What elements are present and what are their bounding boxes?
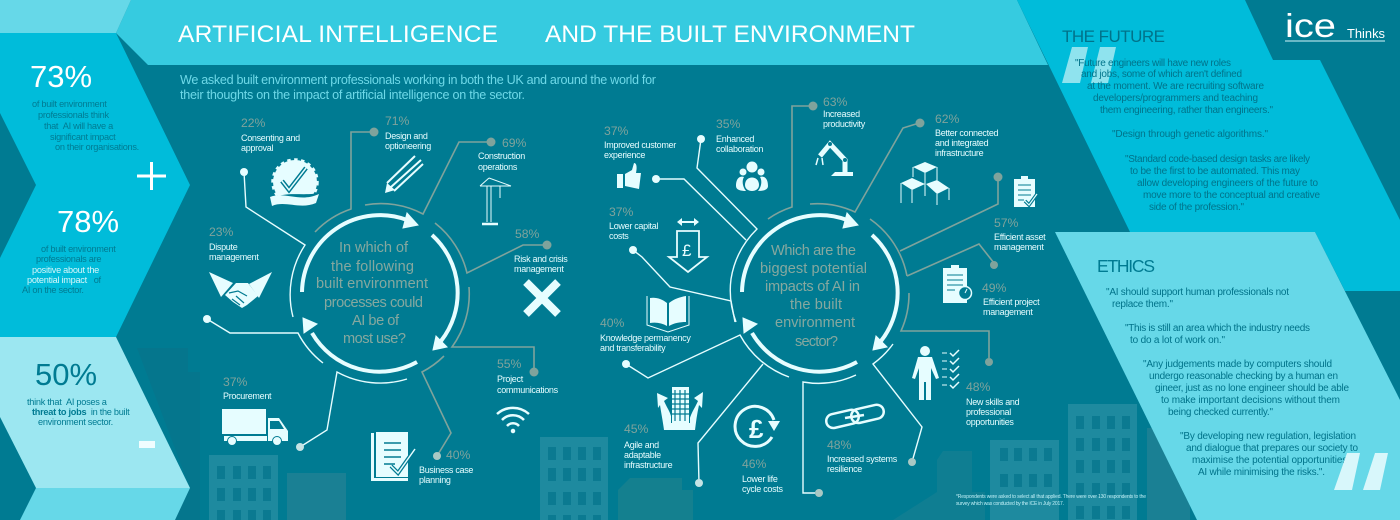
- future quotes: at the moment. We are recruiting software: [1087, 81, 1264, 92]
- footnote: survey which was conducted by the ICE in July 2017.: [956, 501, 1064, 507]
- item: risk and crisis management: management: [514, 264, 564, 274]
- circle question: most use?: [343, 331, 406, 347]
- icon: handshake: [209, 272, 272, 308]
- item: efficient project management: management: [983, 307, 1033, 317]
- icon: group of people: [736, 162, 768, 191]
- item: consenting and approval: [241, 116, 325, 212]
- stat: 78 percent: positive about the: [32, 265, 99, 275]
- icon: minus: [139, 441, 155, 448]
- ethics quotes: "Any judgements made by computers should: [1143, 359, 1332, 370]
- circle question: biggest potential: [760, 261, 867, 277]
- circle question: the built: [790, 297, 842, 313]
- intro text: We asked built environment professionals working in both the UK and around the world for: [180, 73, 656, 87]
- icon: opening quote mark: [1062, 47, 1116, 83]
- item: dispute management: [209, 225, 272, 308]
- ring arrows: [302, 213, 458, 372]
- item: consenting and approval: 22%: [241, 116, 266, 130]
- future quotes: side of the profession.": [1149, 202, 1244, 213]
- item: procurement: [222, 375, 288, 446]
- item: lower life cycle costs: Lower life: [742, 474, 778, 484]
- future quotes: allow developing engineers of the future to: [1137, 178, 1318, 189]
- item: lower life cycle costs: 46%: [742, 457, 767, 471]
- circle question: the following: [331, 259, 414, 275]
- stat: 78 percent: AI on the sector.: [22, 285, 84, 295]
- item: lower life cycle costs: cycle costs: [742, 484, 784, 494]
- item: new skills and professional opportunities: opportunities: [966, 417, 1014, 427]
- connector lines: [203, 128, 552, 460]
- item: new skills and professional opportunities: [912, 346, 1020, 427]
- item: better connected infrastructure: 62%: [935, 112, 960, 126]
- circle question: [760, 243, 867, 350]
- item: better connected infrastructure: Better connected: [935, 128, 999, 138]
- ethics quotes: AI while minimising the risks.".: [1198, 467, 1325, 478]
- item: design and optioneering: optioneering: [385, 141, 431, 151]
- circle question: built environment: [316, 276, 428, 292]
- item: knowledge permanency and transferability: Knowledge permanency: [600, 333, 691, 343]
- chart: impacts circle: [622, 102, 1002, 497]
- item: efficient asset management: [994, 176, 1046, 252]
- ethics quotes: gineer, just as no lone engineer should be able: [1155, 383, 1349, 394]
- item: better connected infrastructure: [901, 112, 999, 205]
- future quotes: developers/programmers and teaching: [1093, 93, 1258, 104]
- logo: ice thinks: [1285, 7, 1385, 44]
- icon: open book: [647, 296, 689, 332]
- item: knowledge permanency and transferability: and transferability: [600, 343, 666, 353]
- item: enhanced collaboration: [716, 117, 768, 191]
- item: risk and crisis management: [514, 227, 568, 314]
- item: increased productivity: [816, 95, 866, 176]
- circle question: processes could: [324, 295, 423, 311]
- ethics quotes: and dialogue that prepares our society to: [1186, 443, 1358, 454]
- item: design and optioneering: 71%: [385, 114, 410, 128]
- item: lower life cycle costs: [735, 406, 784, 494]
- ethics quotes: "By developing new regulation, legislation: [1180, 431, 1356, 442]
- title: ARTIFICIAL INTELLIGENCE: [178, 21, 498, 48]
- ethics quotes: being checked currently.": [1168, 407, 1273, 418]
- footnote: *Respondents were asked to select all that applied. There were over 130 respondents to the: [956, 494, 1146, 500]
- item: increased productivity: 63%: [823, 95, 848, 109]
- future quotes: "Future engineers will have new roles: [1075, 58, 1231, 69]
- item: construction operations: 69%: [502, 136, 527, 150]
- icon: clipboard stopwatch: [943, 265, 972, 303]
- future quotes: [1075, 58, 1320, 213]
- icon: badge: [264, 160, 325, 212]
- stat: 73 percent: [30, 59, 139, 152]
- icon: document with tick: [371, 432, 415, 481]
- intro text: [180, 73, 656, 102]
- item: knowledge permanency and transferability: [600, 296, 691, 353]
- icon: wifi: [497, 408, 529, 432]
- panel: left positive statistics: [0, 0, 190, 337]
- heading: ethics: ETHICS: [1097, 256, 1155, 276]
- item: lower capital costs: 37%: [609, 205, 634, 219]
- item: business case planning: 40%: [446, 448, 471, 462]
- item: dispute management: Dispute: [209, 242, 238, 252]
- item: enhanced collaboration: collaboration: [716, 144, 763, 154]
- ethics quotes: to make important decisions without them: [1161, 395, 1340, 406]
- panel: left threat statistic: [0, 337, 190, 520]
- item: procurement: Procurement: [223, 391, 272, 401]
- circle question: environment: [775, 315, 855, 331]
- item: agile and adaptable infrastructure: 45%: [624, 422, 649, 436]
- item: risk and crisis management: 58%: [515, 227, 540, 241]
- circle question: Which are the: [771, 243, 856, 259]
- future quotes: "Design through genetic algorithms.": [1112, 129, 1268, 140]
- item: increased systems resilience: Increased systems: [827, 454, 898, 464]
- future quotes: move more to the conceptual and creative: [1143, 190, 1320, 201]
- item: agile and adaptable infrastructure: infrastructure: [624, 460, 673, 470]
- icon: plus: [137, 162, 166, 190]
- item: efficient asset management: Efficient asset: [994, 232, 1046, 242]
- icon: crane: [480, 178, 511, 224]
- item: efficient project management: [943, 265, 1040, 317]
- item: project communications: Project: [497, 374, 524, 384]
- ethics quotes: "AI should support human professionals not: [1106, 287, 1289, 298]
- item: increased systems resilience: 48%: [827, 438, 852, 452]
- item: enhanced collaboration: Enhanced: [716, 134, 754, 144]
- item: dispute management: 23%: [209, 225, 234, 239]
- ethics quotes: to do a lot of work on.": [1130, 335, 1225, 346]
- title banner: [116, 0, 1048, 65]
- item: construction operations: Construction: [478, 151, 525, 161]
- item: new skills and professional opportunities: New skills and: [966, 397, 1020, 407]
- item: efficient project management: 49%: [982, 281, 1007, 295]
- icon: robot arm: [816, 142, 853, 176]
- circle question: [316, 240, 428, 347]
- item: new skills and professional opportunities: 48%: [966, 380, 991, 394]
- icon: cross: [526, 282, 558, 314]
- logo: ice thinks: Thinks: [1347, 27, 1385, 41]
- stat: 78 percent: potential impact of: [27, 275, 102, 285]
- icon: pound cycle: £: [749, 414, 764, 444]
- item: construction operations: operations: [478, 162, 518, 172]
- item: lower capital costs: Lower capital: [609, 221, 658, 231]
- item: efficient asset management: 57%: [994, 216, 1019, 230]
- ring arrows: [742, 213, 898, 372]
- item: project communications: [497, 357, 559, 432]
- background city buildings: [137, 348, 1190, 520]
- footnote: [956, 494, 1146, 507]
- item: lower capital costs: [609, 205, 707, 272]
- icon: person with checklist: [912, 346, 959, 400]
- stat: 78 percent: [22, 204, 119, 295]
- intro text: their thoughts on the impact of artificial intelligence on the sector.: [180, 88, 525, 102]
- future quotes: them engineering, rather than engineers.": [1100, 105, 1273, 116]
- stat: 78 percent: of built environment: [41, 244, 116, 254]
- stat: 78 percent: professionals are: [36, 254, 101, 264]
- future quotes: and jobs, some of which aren't defined: [1081, 69, 1242, 80]
- stat: 73 percent: of built environment: [32, 99, 107, 109]
- item: new skills and professional opportunities: professional: [966, 407, 1011, 417]
- circle question: sector?: [795, 334, 838, 350]
- item: increased productivity: productivity: [823, 119, 866, 129]
- item: consenting and approval: Consenting and: [241, 133, 300, 143]
- ethics quotes: undergo reasonable checking by a human en: [1149, 371, 1338, 382]
- item: efficient project management: Efficient project: [983, 297, 1040, 307]
- item: construction operations: [478, 136, 527, 224]
- item: knowledge permanency and transferability: 40%: [600, 316, 625, 330]
- item: increased systems resilience: [825, 403, 898, 474]
- icon: pound down arrow: £: [682, 241, 692, 260]
- icon: truck: [222, 409, 288, 446]
- logo: ice thinks: ice: [1285, 7, 1336, 44]
- future quotes: to be the first to be automated. This may: [1130, 166, 1300, 177]
- item: increased systems resilience: resilience: [827, 464, 862, 474]
- icon: cubes: [901, 162, 949, 205]
- ethics quotes: "This is still an area which the industry needs: [1125, 323, 1310, 334]
- ethics quotes: maximise the potential opportunities of: [1192, 455, 1358, 466]
- icon: closing quote mark: [1334, 453, 1388, 490]
- panel: ethics: [1055, 232, 1400, 520]
- icon: chain: [825, 403, 885, 429]
- item: business case planning: [371, 432, 473, 485]
- chart: processes circle: [203, 128, 552, 460]
- connector lines: [622, 102, 1002, 497]
- icon: pencil: [385, 156, 423, 193]
- ethics quotes: replace them.": [1112, 299, 1173, 310]
- item: improved customer experience: [604, 124, 676, 189]
- item: consenting and approval: approval: [241, 143, 273, 153]
- item: procurement: 37%: [223, 375, 248, 389]
- icon: clipboard tick: [1014, 176, 1037, 207]
- item: improved customer experience: experience: [604, 150, 645, 160]
- ethics quotes: [1106, 287, 1358, 478]
- item: efficient asset management: management: [994, 242, 1044, 252]
- item: enhanced collaboration: 35%: [716, 117, 741, 131]
- item: project communications: 55%: [497, 357, 522, 371]
- stat: 50 percent: threat to jobs in the built: [32, 407, 130, 417]
- stat: 78 percent: 78%: [57, 204, 119, 239]
- item: design and optioneering: Design and: [385, 131, 428, 141]
- item: business case planning: Business case: [419, 465, 473, 475]
- item: dispute management: management: [209, 252, 259, 262]
- item: lower capital costs: costs: [609, 231, 629, 241]
- stat: 50 percent: 50%: [35, 357, 97, 392]
- circle question: In which of: [339, 240, 409, 256]
- item: better connected infrastructure: and integrated: [935, 138, 989, 148]
- item: improved customer experience: Improved customer: [604, 140, 676, 150]
- item: design and optioneering: [385, 114, 431, 193]
- icon: thumbs up: [617, 163, 641, 189]
- stat: 50 percent: [27, 357, 130, 427]
- stat: 73 percent: significant impact: [50, 132, 116, 142]
- item: increased productivity: Increased: [823, 109, 860, 119]
- future quotes: "Standard code-based design tasks are likely: [1125, 154, 1310, 165]
- stat: 73 percent: 73%: [30, 59, 92, 94]
- title: [178, 21, 915, 48]
- item: agile and adaptable infrastructure: Agile and: [624, 440, 659, 450]
- stat: 73 percent: professionals think: [38, 110, 109, 120]
- item: agile and adaptable infrastructure: adaptable: [624, 450, 661, 460]
- icon: building with arrows: [657, 386, 703, 430]
- panel: the future: [1017, 0, 1400, 291]
- stat: 50 percent: environment sector.: [38, 417, 113, 427]
- stat: 73 percent: on their organisations.: [55, 142, 139, 152]
- item: business case planning: planning: [419, 475, 451, 485]
- item: agile and adaptable infrastructure: [624, 386, 703, 470]
- stat: 73 percent: that AI will have a: [44, 121, 114, 131]
- item: improved customer experience: 37%: [604, 124, 629, 138]
- item: better connected infrastructure: infrastructure: [935, 148, 984, 158]
- stat: 50 percent: think that AI poses a: [27, 397, 108, 407]
- title: AND THE BUILT ENVIRONMENT: [545, 21, 915, 48]
- circle question: impacts of AI in: [765, 279, 860, 295]
- item: project communications: communications: [497, 385, 559, 395]
- heading: the future: THE FUTURE: [1062, 27, 1165, 46]
- circle question: AI be of: [352, 313, 400, 329]
- item: risk and crisis management: Risk and crisis: [514, 254, 568, 264]
